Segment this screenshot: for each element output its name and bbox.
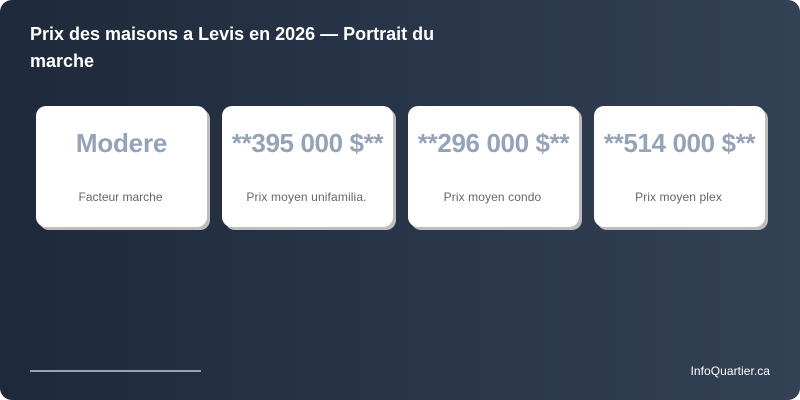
value: **296 000 $** (418, 128, 569, 158)
card: prix moyen plex (594, 106, 765, 227)
accent line (30, 370, 201, 372)
value: **514 000 $** (604, 128, 755, 158)
card: prix moyen unifamilial (222, 106, 393, 227)
label: Prix moyen unifamilia. (246, 190, 367, 204)
label: Facteur marche (78, 190, 163, 204)
label: Prix moyen condo (444, 190, 541, 204)
brand: InfoQuartier.ca (691, 364, 770, 378)
title: Prix des maisons a Levis en 2026 — Portrait du marche (30, 24, 434, 71)
card: facteur marche (36, 106, 207, 227)
value: Modere (76, 128, 167, 158)
card: prix moyen condo (408, 106, 579, 227)
value: **395 000 $** (232, 128, 383, 158)
label: Prix moyen plex (635, 190, 722, 204)
